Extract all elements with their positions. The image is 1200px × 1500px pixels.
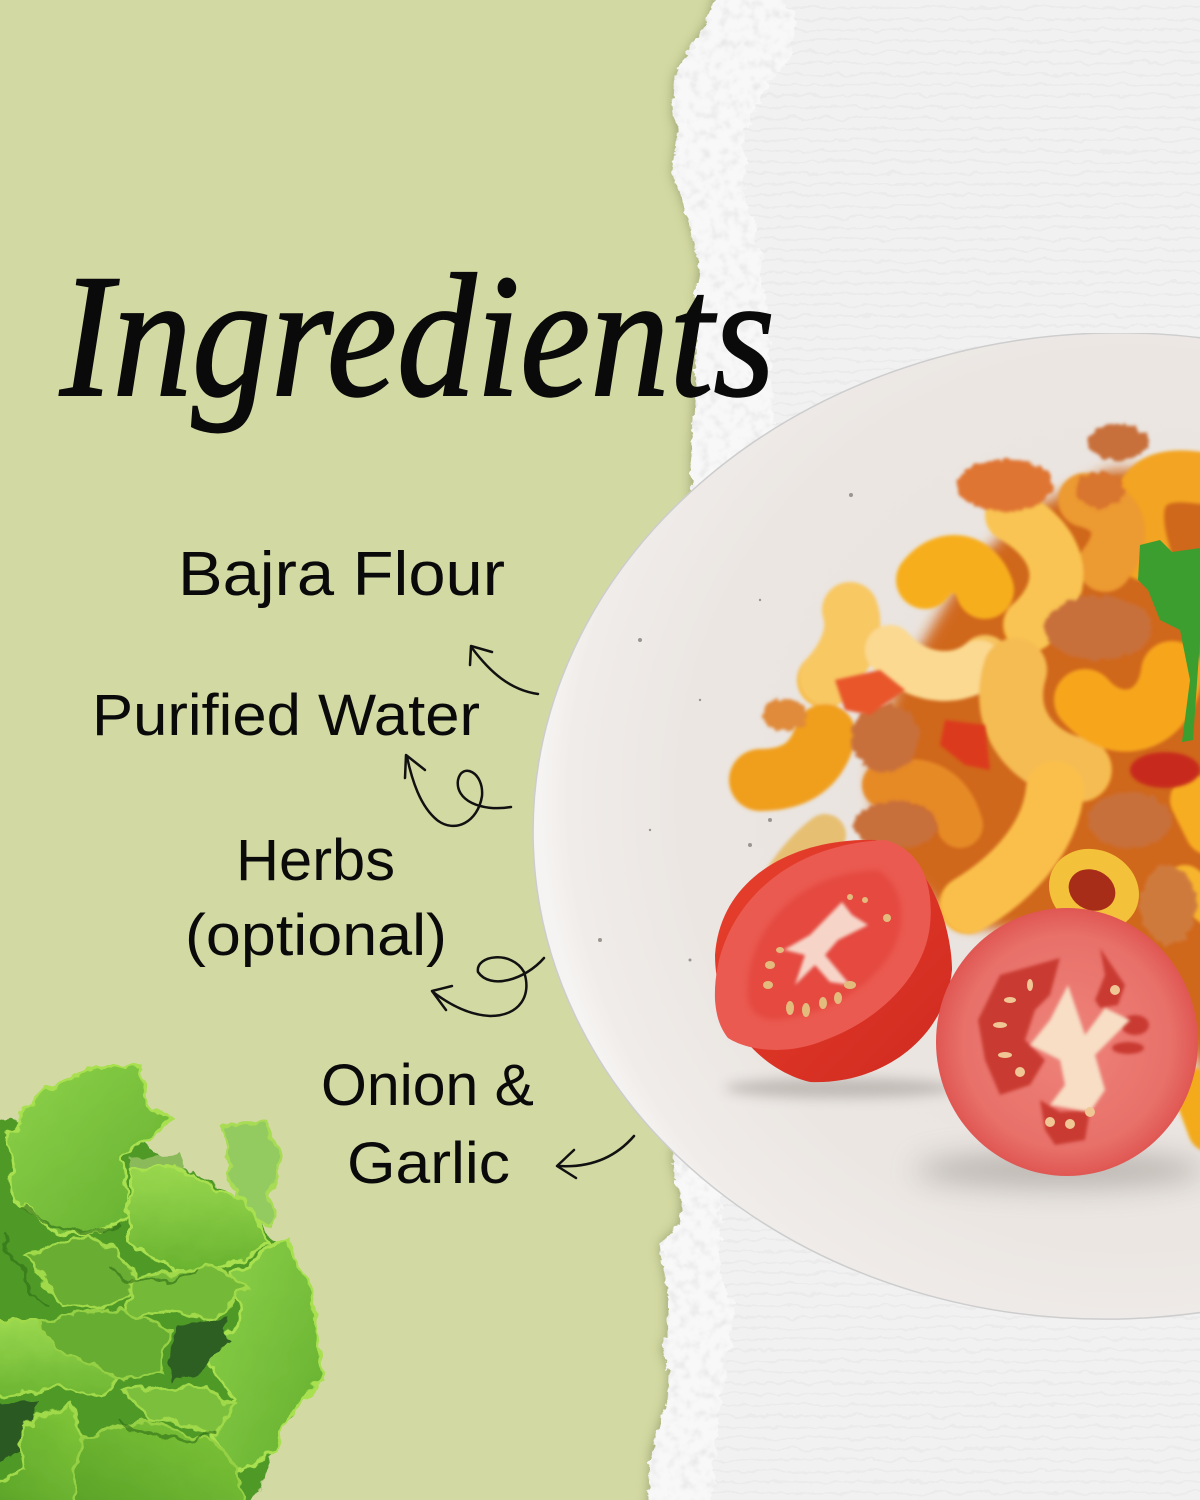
- torn paper shadow: [640, 0, 1200, 1500]
- lettuce dark gap lower: [0, 1402, 40, 1480]
- plate speckles: [598, 493, 853, 962]
- lettuce stem leaf: [222, 1122, 282, 1225]
- coriander leaf: [1138, 540, 1200, 742]
- ingredient: Purified Water: Purified Water: [92, 683, 480, 748]
- title: Ingredients: [59, 239, 775, 434]
- pasta tubes: [760, 476, 1200, 1130]
- lettuce center leaf: [130, 1165, 272, 1270]
- tomato sauce chunks: [835, 670, 1200, 788]
- arrow: Herbs to Purified Water: [405, 755, 511, 826]
- lettuce frill lines: [0, 1205, 215, 1439]
- lettuce bottom center leaf: [120, 1385, 235, 1435]
- lettuce base: [0, 1120, 310, 1500]
- plate: [516, 313, 1200, 1339]
- lettuce left leaf: [25, 1235, 140, 1310]
- tomato shadow: left: [725, 1078, 955, 1098]
- pasta ring: [1049, 848, 1139, 922]
- ingredient: Onion & Garlic: [321, 1053, 534, 1196]
- lettuce: [0, 1068, 322, 1500]
- photo of plate with pasta: [516, 313, 1200, 1339]
- ingredient: Onion & Garlic: Garlic: [347, 1131, 510, 1196]
- lettuce frilled center: [40, 1310, 170, 1380]
- pasta mound base: [870, 470, 1200, 1100]
- ingredient: Herbs (optional): (optional): [185, 903, 447, 968]
- lettuce right big leaf: [205, 1240, 322, 1480]
- textured white paper: [640, 0, 1200, 1500]
- lettuce lower left leaf: [0, 1320, 130, 1400]
- arrow: pointing to Garlic: [557, 1136, 634, 1178]
- meat sauce: [763, 424, 1196, 945]
- right tomato: [936, 908, 1198, 1176]
- pasta ring hole: [1068, 869, 1116, 911]
- tomato chambers: [978, 948, 1149, 1145]
- ingredient: Bajra Flour: Bajra Flour: [178, 540, 505, 609]
- arrow: Onion and Garlic to Herbs: [432, 957, 544, 1016]
- lettuce bottom left leaf: [0, 1405, 85, 1500]
- tomato shadow: right: [915, 1152, 1200, 1188]
- lettuce bottom leaf: [70, 1420, 255, 1500]
- lettuce top leaf: [8, 1068, 172, 1235]
- ingredient: Herbs (optional): [185, 828, 447, 968]
- torn paper rim: [647, 0, 795, 1500]
- lettuce back leaf: [130, 1150, 190, 1220]
- left tomato: [715, 840, 952, 1082]
- lettuce mid leaf: [125, 1265, 245, 1320]
- lettuce dark gap: [170, 1320, 232, 1380]
- ingredient: Herbs (optional): Herbs: [236, 828, 395, 893]
- arrow: Purified Water to Bajra Flour: [470, 646, 538, 694]
- ingredient: Onion & Garlic: Onion &: [321, 1053, 534, 1118]
